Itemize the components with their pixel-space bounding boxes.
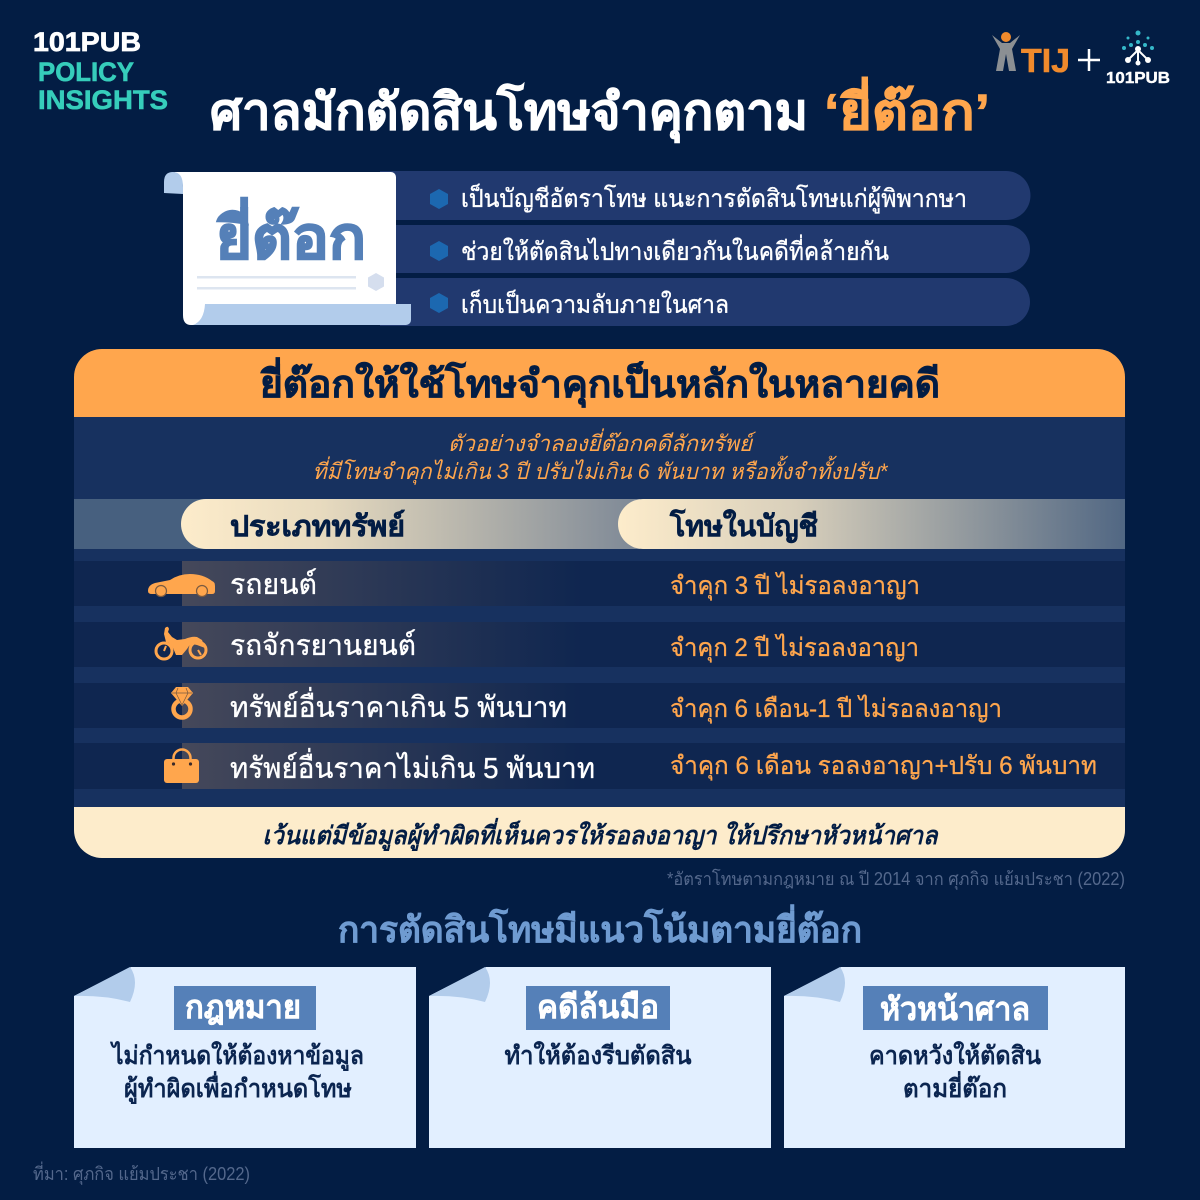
title — [210, 77, 990, 143]
row: motorcycle: จำคุก 2 ปี ไม่รอลงอาญา — [670, 633, 919, 663]
row: motorcycle — [74, 622, 1125, 667]
row: other assets up to 5,000 baht: จำคุก 6 เดือน รอลงอาญา+ปรับ 6 พันบาท — [670, 752, 1097, 781]
logo: TIJ + 101PUB — [992, 30, 1170, 87]
logo: 101PUB Policy Insights: 101PUB — [33, 27, 141, 57]
bar 2 — [380, 225, 1030, 273]
title: ศาลมักตัดสินโทษจำคุกตาม — [210, 82, 808, 143]
icon: motorcycle — [156, 627, 206, 659]
row: other assets up to 5,000 baht — [74, 743, 1125, 789]
card label: กฎหมาย — [185, 989, 301, 1025]
card text — [869, 1040, 1041, 1103]
header: asset type — [181, 499, 640, 549]
table subtitle — [312, 428, 889, 485]
table heading — [74, 349, 1125, 417]
bar 2: ช่วยให้ตัดสินไปทางเดียวกันในคดีที่คล้ายกัน — [461, 234, 889, 266]
icon: car — [148, 574, 215, 596]
logo: TIJ + 101PUB: 101PUB — [1106, 70, 1170, 87]
card label — [174, 986, 316, 1030]
footnote: *อัตราโทษตามกฎหมาย ณ ปี 2014 จาก ศุภกิจ แย้มประชา (2022) — [667, 868, 1125, 890]
card label: หัวหน้าศาล — [880, 991, 1030, 1027]
row: other assets above 5,000 baht — [74, 683, 1125, 728]
panel: sentencing guideline table — [74, 349, 1125, 858]
header: asset type: ประเภททรัพย์ — [230, 509, 405, 543]
icon: paper scroll with yee-tok — [164, 172, 411, 325]
logo: 101PUB Policy Insights — [33, 27, 168, 115]
icon: paper scroll with yee-tok: ยี่ต๊อก — [216, 197, 366, 271]
card text: ตามยี่ต๊อก — [903, 1071, 1007, 1103]
table heading: ยี่ต๊อกให้ใช้โทษจำคุกเป็นหลักในหลายคดี — [260, 357, 940, 408]
row: other assets above 5,000 baht: จำคุก 6 เดือน-1 ปี ไม่รอลงอาญา — [670, 694, 1002, 724]
row: car: รถยนต์ — [230, 568, 317, 601]
row: other assets above 5,000 baht: ทรัพย์อื่นราคาเกิน 5 พันบาท — [230, 687, 567, 724]
row: motorcycle: รถจักรยานยนต์ — [230, 629, 416, 662]
logo: 101PUB Policy Insights: POLICY — [38, 57, 134, 87]
row: car — [74, 561, 1125, 606]
row: other assets up to 5,000 baht: ทรัพย์อื่นราคาไม่เกิน 5 พันบาท — [230, 748, 595, 785]
section heading: การตัดสินโทษมีแนวโน้มตามยี่ต๊อก — [338, 904, 862, 950]
bar 3: เก็บเป็นความลับภายในศาล — [461, 289, 729, 319]
card label: คดีล้นมือ — [537, 989, 659, 1025]
panel: yee-tok description bars — [380, 171, 1030, 326]
card text: ทำให้ต้องรีบตัดสิน — [504, 1040, 692, 1070]
table footer note — [74, 807, 1125, 858]
icon: shopping bag — [164, 750, 199, 783]
table subtitle: ตัวอย่างจำลองยี่ต๊อกคดีลักทรัพย์ — [448, 428, 757, 456]
header: penalty — [618, 499, 1125, 549]
bar 1: เป็นบัญชีอัตราโทษ แนะการตัดสินโทษแก่ผู้พิพากษา — [461, 183, 967, 214]
logo: TIJ + 101PUB: TIJ — [1021, 42, 1070, 79]
card label — [863, 986, 1048, 1030]
card text: ไม่กำหนดให้ต้องหาข้อมูล — [109, 1040, 364, 1072]
card: overloaded cases — [429, 967, 771, 1148]
card: law — [74, 967, 416, 1148]
table subtitle: ที่มีโทษจำคุกไม่เกิน 3 ปี ปรับไม่เกิน 6 พันบาท หรือทั้งจำทั้งปรับ* — [312, 455, 889, 485]
bar 1 — [380, 171, 1030, 220]
source: ที่มา: ศุภกิจ แย้มประชา (2022) — [33, 1161, 250, 1185]
table header row — [74, 499, 1125, 549]
title: ‘ยี่ต๊อก’ — [824, 77, 990, 140]
card text: ผู้ทำผิดเพื่อกำหนดโทษ — [124, 1071, 352, 1105]
logo: 101PUB Policy Insights: INSIGHTS — [38, 85, 168, 115]
bar 3 — [380, 278, 1030, 326]
card text: คาดหวังให้ตัดสิน — [869, 1040, 1041, 1070]
card text — [109, 1040, 364, 1105]
table footer note: เว้นแต่มีข้อมูลผู้ทำผิดที่เห็นควรให้รอลงอาญา ให้ปรึกษาหัวหน้าศาล — [262, 817, 939, 851]
icon: ring — [171, 687, 193, 718]
header: penalty: โทษในบัญชี — [669, 508, 818, 544]
card: chief judge — [784, 967, 1125, 1148]
table body — [74, 400, 1125, 830]
row: car: จำคุก 3 ปี ไม่รอลงอาญา — [670, 571, 920, 601]
